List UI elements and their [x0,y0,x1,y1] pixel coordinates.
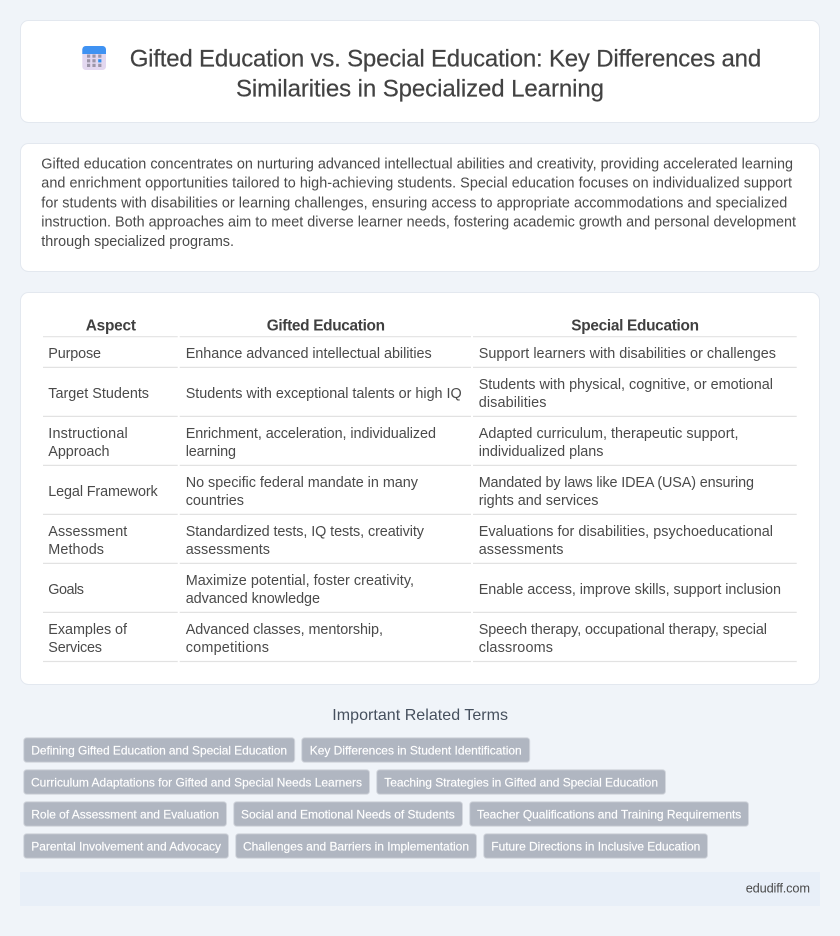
panel: related term tags: Teaching Strategies in Gifted and Special Education [384,775,658,789]
row: instructional approach [48,426,739,460]
row: assessment methods: Standardized tests, IQ tests, creativity [186,524,425,540]
table header row: Special Education [571,318,699,335]
row: instructional approach: Enrichment, acceleration, individualized [186,426,436,442]
row: examples of services: classrooms [479,640,553,656]
row: target students: Students with physical, cognitive, or emotional [479,377,773,393]
row: instructional approach: individualized plans [479,444,604,460]
text block: summary paragraph: for students with disabilities or learning challenges, ensuring access to appropriate accommodations and specialized [41,195,787,211]
panel: comparison table [20,292,820,684]
row: target students: disabilities [479,395,546,411]
row: assessment methods: assessments [186,542,270,558]
text block: summary paragraph: through specialized programs. [41,234,234,250]
row: examples of services: Services [48,640,102,656]
row: examples of services [48,622,767,656]
table header row: Aspect [86,318,136,335]
row: legal framework: countries [186,493,244,509]
row: legal framework: Mandated by laws like IDEA (USA) ensuring [479,475,754,491]
title: Gifted Education vs. Special Education: Key Differences and [130,46,761,72]
row: examples of services: Examples of [48,622,128,638]
row: purpose: Purpose [48,346,101,362]
panel: related term tags: Role of Assessment and Evaluation [31,807,219,821]
panel: related term tags: Key Differences in Student Identification [310,743,522,757]
row: instructional approach: learning [186,444,236,460]
panel: related term tags: Challenges and Barriers in Implementation [243,839,469,853]
row: target students: Students with exceptional talents or high IQ [186,386,462,402]
row: purpose: Support learners with disabilities or challenges [479,346,776,362]
title [130,46,761,102]
table header row [86,318,699,335]
footer bar [20,872,820,906]
row: assessment methods: Methods [48,542,104,558]
icon: calendar grid [82,46,106,70]
row: target students [48,377,773,411]
panel: introduction text [20,144,820,272]
row: purpose: Enhance advanced intellectual abilities [186,346,432,362]
row: legal framework: rights and services [479,493,598,509]
row: goals [48,573,781,607]
row: purpose [48,346,776,362]
text block: summary paragraph: instruction. Both approaches aim to meet diverse learner needs, fostering academic growth and personal development [41,214,796,230]
heading: important related terms: Important Related Terms [332,707,508,724]
row: legal framework: Legal Framework [48,484,158,500]
panel: related term tags: Future Directions in Inclusive Education [491,839,700,853]
row: examples of services: competitions [186,640,269,656]
row: goals: advanced knowledge [186,591,320,607]
row: legal framework: No specific federal mandate in many [186,475,419,491]
panel: related term tags: Curriculum Adaptations for Gifted and Special Needs Learners [31,775,362,789]
row: target students: Target Students [48,386,149,402]
title: Similarities in Specialized Learning [236,76,604,102]
row: goals: Maximize potential, foster creativity, [186,573,414,589]
row: instructional approach: Approach [48,444,110,460]
row: examples of services: Speech therapy, occupational therapy, special [479,622,767,638]
row: instructional approach: Instructional [48,426,128,442]
row: assessment methods: assessments [479,542,564,558]
row: instructional approach: Adapted curriculum, therapeutic support, [479,426,738,442]
panel: header [20,20,820,122]
panel: related term tags: Social and Emotional Needs of Students [241,807,455,821]
row: legal framework [48,475,754,509]
row: assessment methods: Evaluations for disabilities, psychoeducational [479,524,773,540]
panel: related term tags: Defining Gifted Education and Special Education [31,743,287,757]
footer bar: edudiff.com [746,881,810,896]
row: assessment methods: Assessment [48,524,127,540]
text block: summary paragraph [41,156,796,250]
row: assessment methods [48,524,773,558]
text block: summary paragraph: Gifted education concentrates on nurturing advanced intellectual abilities and creativity, providing accelerated learning [41,156,793,172]
row: examples of services: Advanced classes, mentorship, [186,622,383,638]
table header row: Gifted Education [267,318,385,335]
row: goals: Enable access, improve skills, support inclusion [479,582,781,598]
row: goals: Goals [48,582,84,598]
text block: summary paragraph: and enrichment opportunities tailored to high-achieving students. Special education focuses on individualized support [41,176,792,192]
panel: related term tags: Parental Involvement and Advocacy [31,839,221,853]
panel: related term tags: Teacher Qualifications and Training Requirements [477,807,741,821]
panel: related term tags [24,738,748,858]
